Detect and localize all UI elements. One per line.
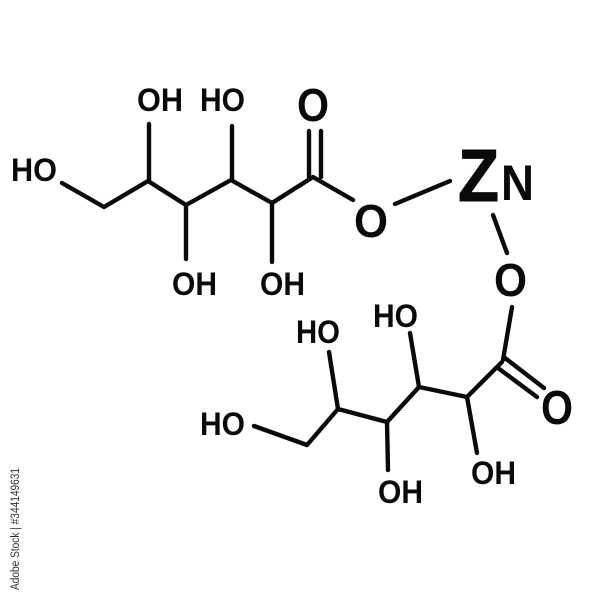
label: HO left: HO [200, 406, 245, 442]
stock image credit: Adobe Stock | #344149631 [10, 468, 22, 590]
label: OH top: OH [137, 82, 183, 118]
label: OH bottom right: OH [471, 455, 516, 491]
zinc centre with ester oxygens [354, 134, 534, 360]
lower hydroxyl bonds [329, 333, 477, 470]
lower carbon chain bonds [254, 362, 502, 445]
upper carbonyl double bond [309, 131, 321, 177]
label: HO top: HO [373, 298, 418, 334]
label: ester O lower: O [494, 254, 527, 306]
lower carbonyl double bond [498, 358, 544, 397]
label: OH bottom: OH [172, 266, 217, 302]
bond: Zn to O [493, 215, 507, 253]
label: OH bottom: OH [378, 474, 423, 510]
label: carbonyl O: O [297, 79, 329, 131]
label: OH bottom right: OH [260, 266, 305, 302]
label: carbonyl O: O [541, 382, 573, 435]
label: ester O upper: O [354, 195, 388, 247]
label: Z: Z [458, 134, 499, 217]
label: HO left: HO [11, 152, 57, 188]
label: HO second: HO [296, 314, 340, 350]
bond: O to lower carbon [503, 307, 512, 360]
label: N: N [501, 155, 534, 211]
upper gluconate molecule [11, 79, 353, 302]
lower gluconate molecule [200, 298, 573, 510]
label: HO top: HO [200, 82, 245, 118]
upper hydroxyl bonds [149, 124, 272, 262]
bond: O to Zn [395, 181, 450, 204]
upper carbon chain bonds [62, 177, 353, 207]
